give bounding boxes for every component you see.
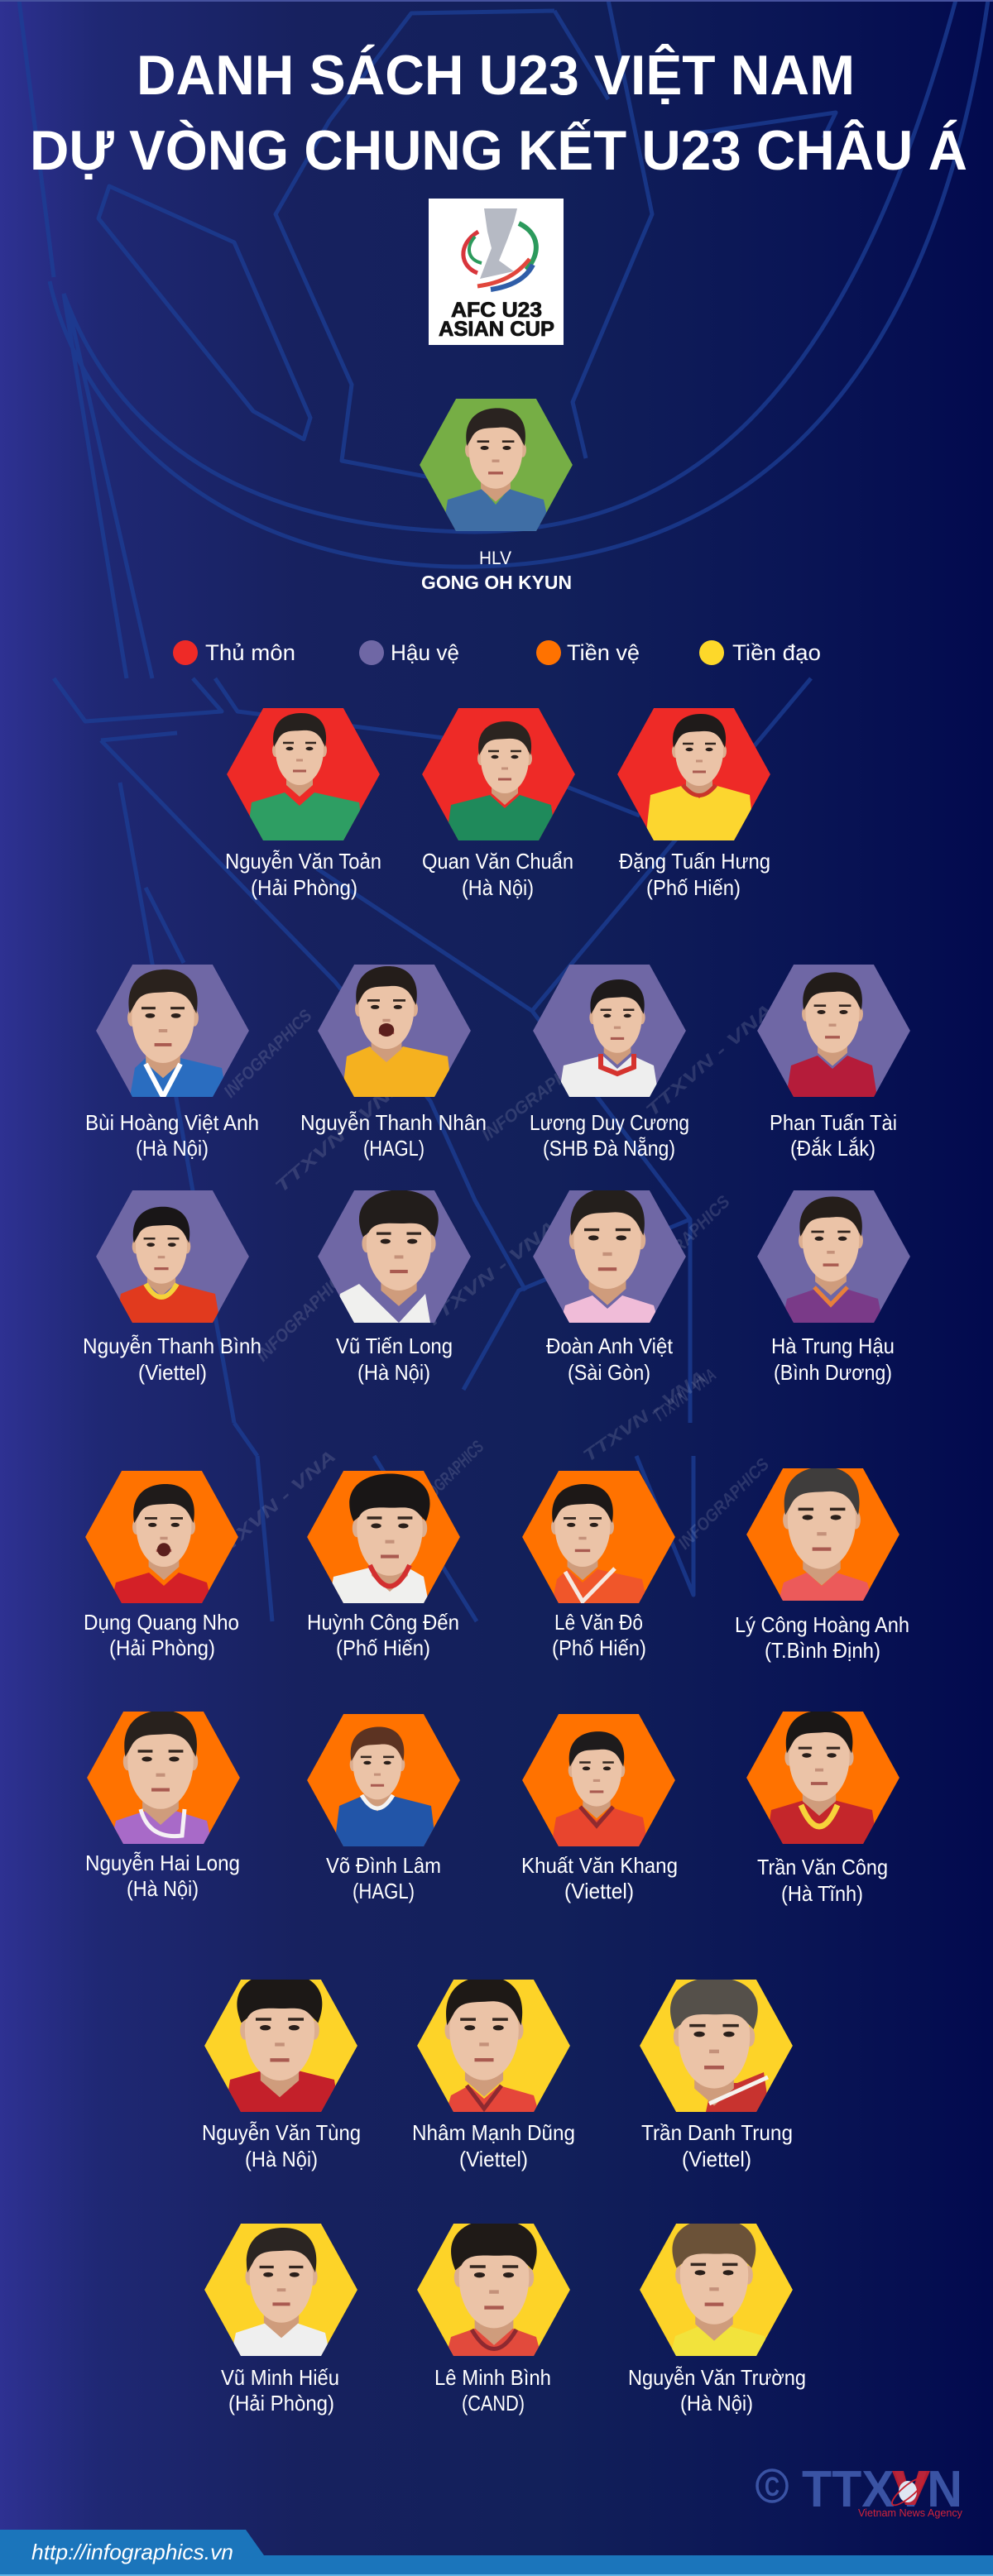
watermarks: TTXVN - VNA [580,1367,709,1466]
section: midfielders [84,1467,909,1906]
player: Vũ Minh Hiếu: Vũ Minh Hiếu [221,2365,339,2390]
player: Đoàn Anh Việt: (Sài Gòn) [568,1360,650,1385]
player: Vũ Tiến Long: Vũ Tiến Long [336,1333,453,1358]
player: Nguyễn Văn Toản: (Hải Phòng) [251,875,357,900]
player: Bùi Hoàng Việt Anh: (Hà Nội) [136,1136,209,1161]
player: Nguyễn Thanh Bình: (Viettel) [138,1360,207,1385]
TTXVN logo: TTXVN [802,2461,962,2518]
player: Hà Trung Hậu [757,1190,910,1385]
player: Nguyễn Văn Toản: Nguyễn Văn Toản [225,849,381,874]
player: Lê Minh Bình: Lê Minh Bình [434,2365,551,2390]
player: Trần Danh Trung: Trần Danh Trung [641,2120,793,2145]
legend: Thủ môn [205,640,295,665]
player: Dụng Quang Nho: Dụng Quang Nho [84,1610,239,1635]
player: Phan Tuấn Tài [757,965,910,1161]
player: Nhâm Mạnh Dũng: (Viettel) [459,2147,528,2171]
title [30,43,967,182]
player: Nguyễn Thanh Nhân: (HAGL) [363,1136,425,1161]
player: Nhâm Mạnh Dũng [412,1976,575,2171]
player: Lê Văn Đô: (Phố Hiến) [552,1635,646,1660]
player: Trần Văn Công: (Hà Tĩnh) [781,1881,863,1906]
player: Lê Minh Bình: (CAND) [462,2391,525,2416]
player: Trần Danh Trung [640,1977,793,2171]
player: Phan Tuấn Tài: (Đắk Lắk) [790,1136,875,1161]
player: Nguyễn Văn Trường: (Hà Nội) [680,2391,753,2416]
watermarks: TTXVN - VNA [642,1000,776,1121]
watermarks: INFOGRAPHICS [674,1455,773,1554]
player: Vũ Tiến Long: (Hà Nội) [357,1360,430,1385]
player: Võ Đình Lâm: (HAGL) [353,1879,415,1903]
player: Nguyễn Thanh Nhân: Nguyễn Thanh Nhân [300,1110,487,1135]
player: Trần Văn Công [746,1711,899,1906]
player: Hà Trung Hậu: Hà Trung Hậu [771,1333,895,1358]
watermarks: INFOGRAPHICS [252,1264,354,1366]
player: Lý Công Hoàng Anh: (T.Bình Định) [765,1638,880,1663]
legend: Tiền đạo [732,640,821,665]
player: Vũ Tiến Long [318,1190,471,1385]
coach name: GONG OH KYUN [421,572,572,593]
player: Quan Văn Chuẩn [422,708,575,900]
player: Đặng Tuấn Hưng: (Phố Hiến) [646,875,741,900]
title: DỰ VÒNG CHUNG KẾT U23 CHÂU Á [30,118,967,182]
logo: AFC U23 Asian Cup: AFC U23 [451,299,542,322]
player: Đặng Tuấn Hưng: Đặng Tuấn Hưng [619,849,770,874]
legend: Tiền vệ [567,640,640,665]
player: Nguyễn Văn Trường: Nguyễn Văn Trường [628,2365,806,2390]
watermarks [209,1000,776,1564]
player: Lương Duy Cương: Lương Duy Cương [530,1110,689,1135]
logo: AFC U23 Asian Cup: ASIAN CUP [439,318,554,341]
player: Lê Văn Đô [522,1471,675,1660]
TTXVN logo: Vietnam News Agency [858,2507,962,2519]
watermarks: INFOGRAPHICS [410,1437,487,1515]
player: Lý Công Hoàng Anh: Lý Công Hoàng Anh [735,1612,909,1637]
player: Lê Minh Bình [417,2219,570,2416]
coach [420,399,573,593]
player: Nguyễn Thanh Nhân [300,965,487,1161]
player: Nguyễn Thanh Bình: Nguyễn Thanh Bình [83,1333,261,1358]
player: Lê Văn Đô: Lê Văn Đô [554,1610,643,1635]
player: Bùi Hoàng Việt Anh [85,965,259,1161]
player: Dụng Quang Nho: (Hải Phòng) [109,1635,215,1660]
player: Nguyễn Văn Tùng: (Hà Nội) [245,2147,318,2171]
player: Huỳnh Công Đến [307,1471,460,1660]
player: Trần Danh Trung: (Viettel) [682,2147,751,2171]
footer band [0,2530,993,2576]
player: Khuất Văn Khang: Khuất Văn Khang [521,1853,678,1878]
player: Quan Văn Chuẩn: Quan Văn Chuẩn [422,849,573,874]
player: Nguyễn Văn Toản [225,708,381,900]
watermarks: INFOGRAPHICS [478,1048,594,1145]
TTXVN logo: C [765,2472,780,2502]
player: Phan Tuấn Tài: Phan Tuấn Tài [770,1110,897,1135]
watermarks: TTXVN - VNA [271,1074,409,1197]
section: forwards [202,1972,806,2416]
player: Huỳnh Công Đến: (Phố Hiến) [336,1635,430,1660]
player: Huỳnh Công Đến: Huỳnh Công Đến [307,1610,459,1635]
coach portrait [420,399,573,531]
legend: Hậu vệ [391,640,459,665]
watermarks: INFOGRAPHICS [220,1006,316,1102]
player: Vũ Minh Hiếu: (Hải Phòng) [228,2391,334,2416]
logo: AFC U23 Asian Cup [429,199,564,345]
watermarks: INFOGRAPHICS [632,1192,734,1294]
player: Lương Duy Cương [530,965,689,1161]
coach label: HLV [479,548,511,568]
player: Nhâm Mạnh Dũng: Nhâm Mạnh Dũng [412,2120,575,2145]
section: goalkeepers [225,708,770,900]
player: Bùi Hoàng Việt Anh: Bùi Hoàng Việt Anh [85,1110,259,1135]
footer band: http://infographics.vn [31,2540,233,2564]
player: Lương Duy Cương: (SHB Đà Nẵng) [543,1136,675,1161]
player: Hà Trung Hậu: (Bình Dương) [774,1360,892,1385]
player: Khuất Văn Khang [521,1714,678,1903]
player: Nguyễn Văn Tùng: Nguyễn Văn Tùng [202,2120,361,2145]
player: Nguyễn Thanh Bình [83,1190,261,1385]
player: Dụng Quang Nho [84,1471,239,1660]
watermarks: TTXVN - VNA [209,1447,340,1564]
player: Khuất Văn Khang: (Viettel) [564,1879,634,1903]
player: Nguyễn Văn Trường [628,2219,806,2416]
player: Nguyễn Văn Tùng [202,1972,361,2171]
player: Lý Công Hoàng Anh [735,1467,909,1663]
player: Quan Văn Chuẩn: (Hà Nội) [462,875,534,900]
player: Võ Đình Lâm [307,1714,460,1903]
watermarks: TTXVN - VNA [421,1218,560,1332]
player: Nguyễn Hai Long [85,1711,240,1901]
watermarks: TTXVN - VNA [650,1365,720,1426]
player: Đoàn Anh Việt: Đoàn Anh Việt [546,1333,674,1358]
player: Đặng Tuấn Hưng [617,708,770,900]
legend [173,640,821,665]
player: Trần Văn Công: Trần Văn Công [757,1855,888,1879]
player: Đoàn Anh Việt [533,1188,686,1385]
player: Võ Đình Lâm: Võ Đình Lâm [326,1853,441,1878]
title: DANH SÁCH U23 VIỆT NAM [137,43,855,107]
player: Vũ Minh Hiếu [204,2224,357,2416]
player: Nguyễn Hai Long: (Hà Nội) [127,1876,199,1901]
player: Nguyễn Hai Long: Nguyễn Hai Long [85,1851,240,1875]
section: defenders [83,965,910,1385]
